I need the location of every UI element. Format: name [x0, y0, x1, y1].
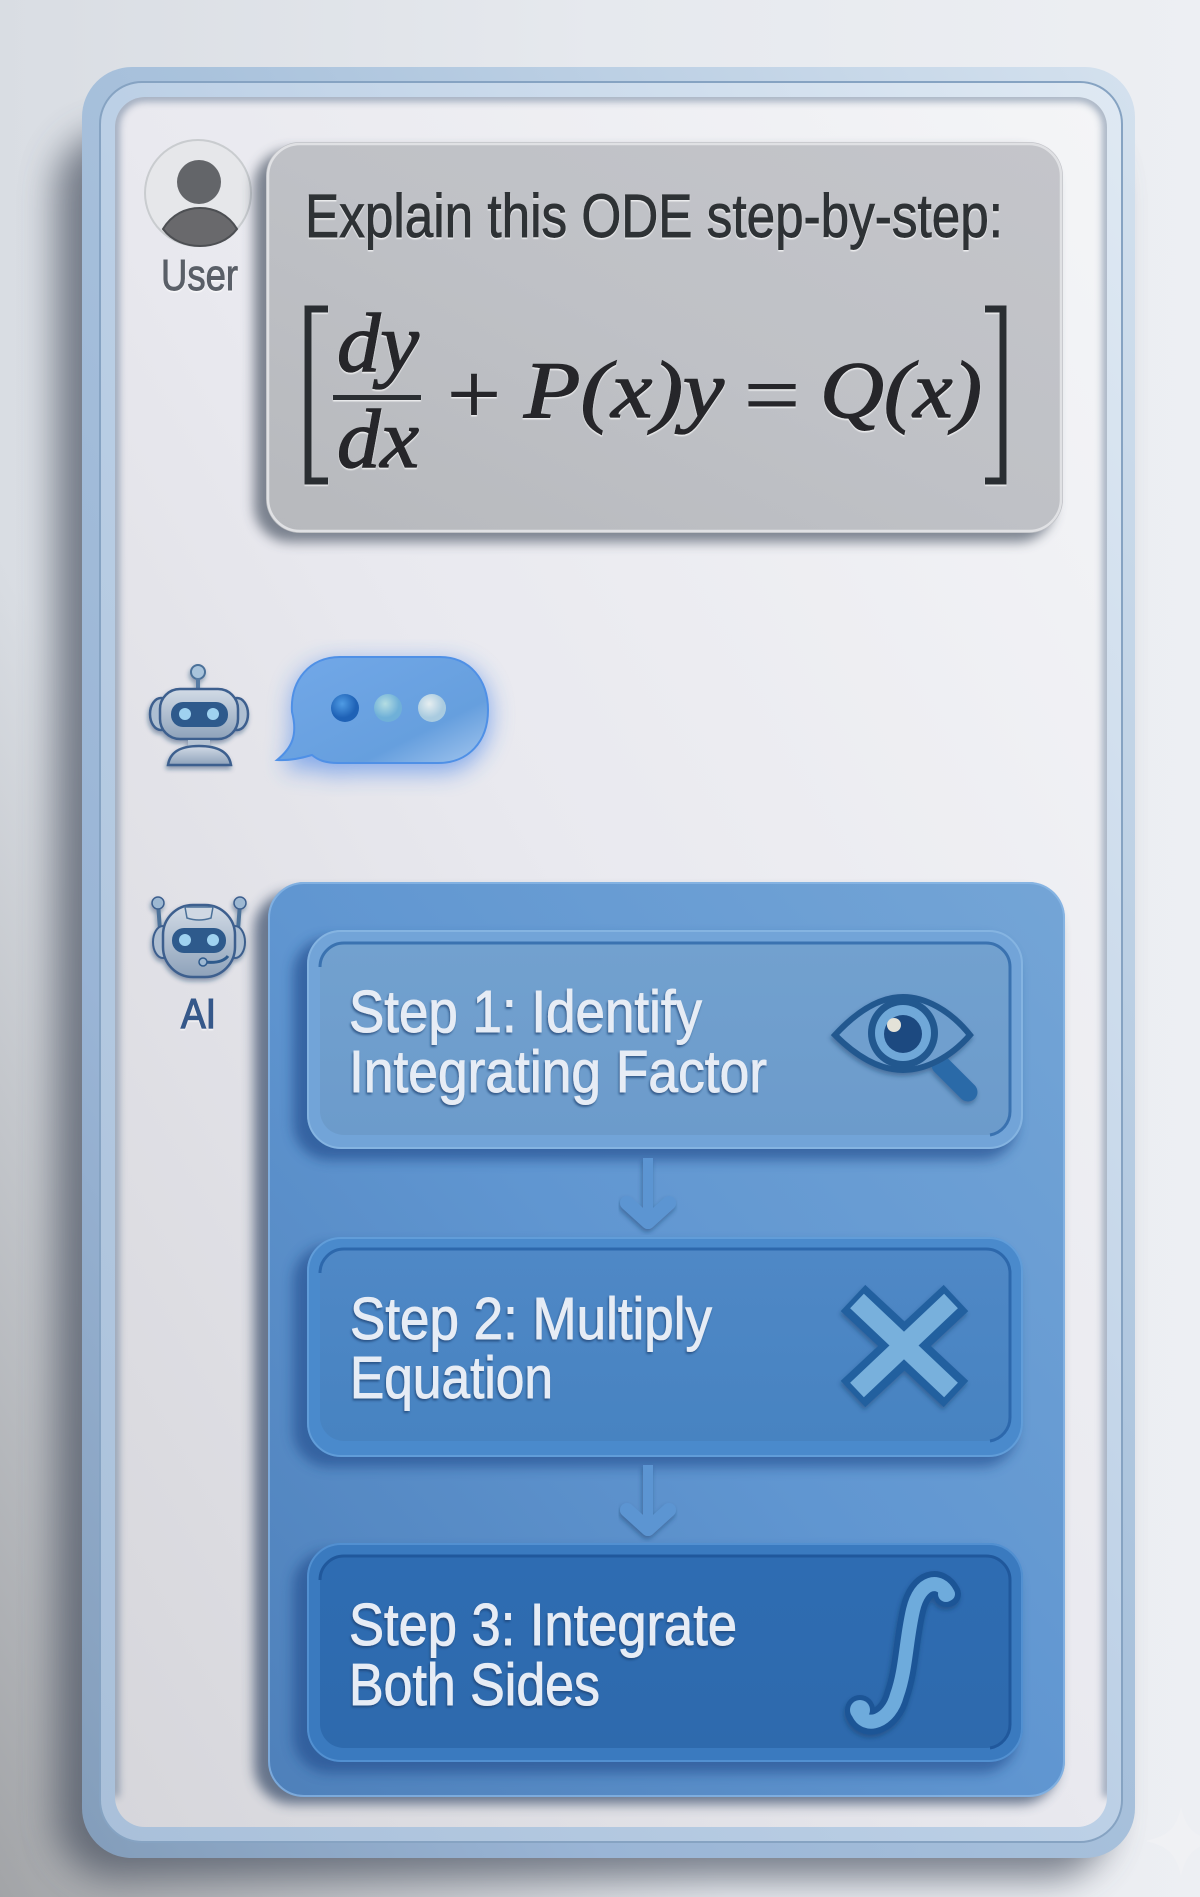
- plus P(x)y equals Q(x): =: [744, 347, 800, 443]
- equation: [308, 297, 1003, 486]
- arrow: step 1 to step 2: [627, 1158, 669, 1222]
- panel: AI response: [254, 882, 1065, 1804]
- watermark: sparkle star: [1146, 1807, 1200, 1876]
- step 3 text: Both Sides: [349, 1652, 600, 1718]
- fraction dy/dx: [333, 297, 421, 486]
- step 2 text: [350, 1286, 712, 1411]
- step 1 text: Integrating Factor: [349, 1039, 767, 1105]
- step 3 text: Step 3: Integrate: [349, 1592, 737, 1658]
- label: AI: AI: [181, 990, 216, 1037]
- step 3 card: [293, 1543, 1023, 1773]
- label: User: User: [161, 251, 238, 300]
- icon: user shoulders: [163, 208, 237, 246]
- right bracket: [985, 309, 1003, 481]
- icon: small robot: [150, 665, 248, 765]
- fraction dy/dx: dy: [337, 297, 420, 390]
- plus P(x)y equals Q(x): P(x)y: [523, 347, 725, 435]
- user prompt text: Explain this ODE step-by-step:: [305, 182, 1003, 250]
- step 1 text: [349, 979, 767, 1105]
- step 3 text: [349, 1592, 737, 1718]
- step 2 text: Equation: [350, 1345, 553, 1411]
- typing dot 1: [331, 694, 359, 722]
- step 1 card: [293, 930, 1023, 1160]
- step 1 text: Step 1: Identify: [349, 979, 702, 1045]
- icon: multiply cross: [853, 1298, 956, 1394]
- typing dot 3: [418, 694, 446, 722]
- step 2 card: [293, 1237, 1023, 1467]
- typing indicator bubble: [277, 657, 490, 774]
- left bracket: [308, 309, 328, 481]
- arrow: step 2 to step 3: [627, 1465, 669, 1529]
- step 2 text: Step 2: Multiply: [350, 1286, 712, 1352]
- plus P(x)y equals Q(x): +: [447, 346, 501, 442]
- plus P(x)y equals Q(x): Q(x): [820, 347, 982, 435]
- fraction dy/dx: dx: [337, 393, 419, 486]
- icon: AI robot: [152, 897, 246, 977]
- icon: integral sign: [845, 1581, 959, 1725]
- avatar: user: [144, 139, 252, 247]
- icon: user head: [177, 160, 221, 204]
- plus P(x)y equals Q(x): [447, 346, 982, 443]
- icon: eye with magnifier: [835, 997, 970, 1092]
- typing dot 2: [374, 694, 402, 722]
- panel: user message bubble: [254, 142, 1063, 542]
